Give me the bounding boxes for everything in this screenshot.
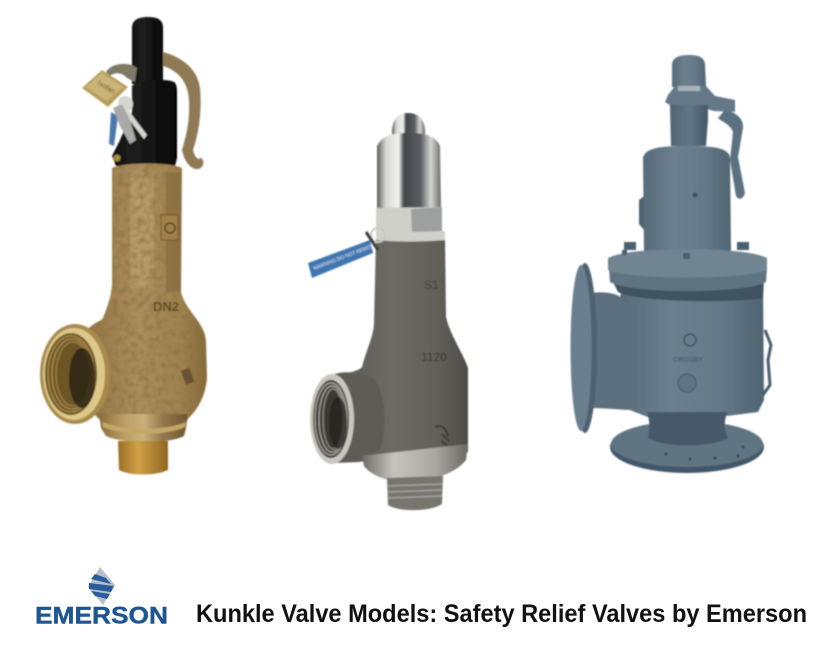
- bonnet bolt mark: [692, 192, 698, 198]
- black cap: [132, 17, 163, 84]
- bottom neck: [647, 412, 728, 446]
- tag text: WARNING DO NOT REMOVE: [313, 242, 379, 272]
- hex nut shaded face: [411, 207, 442, 233]
- left flange face: [570, 265, 592, 431]
- lower collar: [99, 414, 188, 442]
- threaded outlet: [118, 441, 168, 474]
- upper neck: [670, 105, 708, 146]
- tag wire: [366, 232, 378, 250]
- padlock body: [82, 70, 128, 107]
- inlet threaded bore: [45, 333, 97, 415]
- brass mottling: [80, 164, 207, 420]
- body: [620, 280, 764, 418]
- side boss: [639, 196, 644, 230]
- body plug: [678, 374, 696, 392]
- stainless collar: [362, 444, 468, 482]
- threaded outlet: [387, 476, 443, 510]
- wordmark: EMERSON: [35, 602, 168, 630]
- casting mark lower: [435, 426, 449, 445]
- icon: Emerson diamond: [88, 567, 115, 605]
- bottom flange: [611, 421, 763, 467]
- body neck and housing: [340, 240, 468, 462]
- flange bolts: [622, 242, 749, 259]
- inlet bore shadow: [329, 397, 347, 449]
- outlet pipe: [590, 292, 636, 410]
- bottom flange holes: [664, 446, 744, 460]
- top cap: [672, 55, 706, 87]
- bonnet: [643, 146, 731, 252]
- inlet threaded bore: [313, 380, 349, 458]
- casting text: CROSBY: [673, 357, 703, 364]
- casting mark upper: S1: [424, 278, 439, 292]
- padlock brand: Ixofan: [96, 80, 116, 96]
- neck highlight: [130, 178, 154, 288]
- inlet ring: [310, 374, 354, 464]
- bright pin: [678, 86, 700, 91]
- padlock top face: [86, 73, 123, 101]
- padlock shackle and ring: [106, 64, 137, 82]
- body flange upper: [608, 249, 767, 278]
- lever handle: [718, 110, 745, 199]
- casting text: DN2: [153, 299, 179, 314]
- neck shadow: [166, 172, 181, 292]
- chrome knob: [392, 113, 425, 135]
- collar ring: [102, 422, 186, 434]
- raised nameplate boss: [161, 215, 178, 240]
- valve: large blue-grey flanged valve: [570, 55, 771, 473]
- tag ring: [371, 228, 385, 242]
- inlet flange ring: [40, 324, 110, 424]
- lever yoke: [665, 86, 735, 112]
- outlet pipe: [332, 372, 385, 463]
- side plug: [181, 368, 194, 385]
- key one: [118, 96, 147, 139]
- body flange lower: [609, 268, 767, 291]
- hex nut: [376, 207, 442, 233]
- thread lines: [388, 484, 442, 498]
- casting mark: [165, 223, 175, 233]
- body nameplate mark: [684, 334, 696, 346]
- valve: brass safety relief valve with padlock: [40, 17, 207, 474]
- left flange rim: [573, 263, 597, 433]
- blue tag: [308, 240, 373, 278]
- blue tag strap: [109, 112, 118, 146]
- inlet bore shadow: [69, 348, 95, 408]
- chrome cap: [377, 133, 441, 209]
- black bonnet: [112, 80, 177, 166]
- bottom flange edge: [610, 421, 764, 473]
- key two: [113, 104, 136, 144]
- steel ring under nut: [376, 231, 445, 242]
- inlet rim highlight: [43, 328, 105, 420]
- casting text 120: 1120: [421, 350, 447, 364]
- title: Kunkle Valve Models: Safety Relief Valves by Emerson: [196, 600, 807, 628]
- lever handle: [163, 52, 203, 169]
- valve: grey iron valve with chrome cap: [308, 113, 468, 510]
- side chain: [763, 330, 771, 395]
- flange shadow: [612, 280, 764, 301]
- pin at bonnet base: [114, 154, 120, 162]
- brass neck and body: [80, 164, 207, 420]
- logo: Emerson: [35, 567, 168, 630]
